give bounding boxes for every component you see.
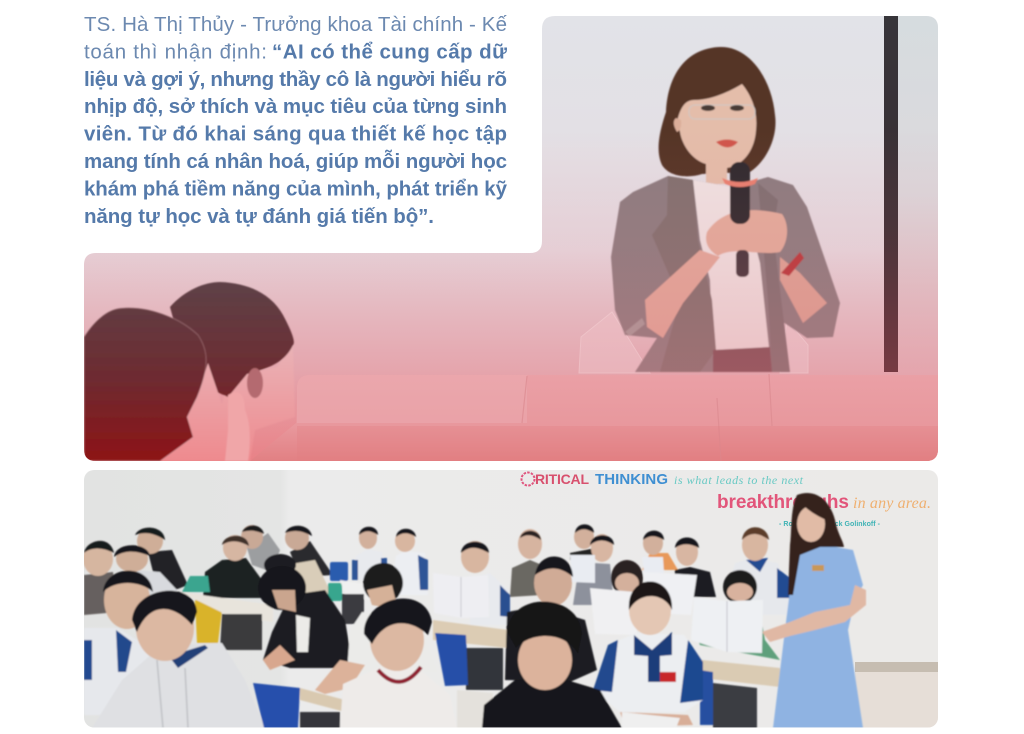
panel: speaker photo with pink gradient — [84, 16, 938, 461]
pink fade over speaker — [84, 175, 938, 458]
quote text block: năng tự học và tự đánh giá tiến bộ”. — [84, 205, 434, 228]
quote text block: toán thì nhận định: — [84, 40, 267, 63]
middle row students, left side — [84, 563, 438, 715]
quote text block: nhịp độ, sở thích và mục tiêu của từng sinh — [84, 95, 507, 118]
panel: classroom photo — [83, 470, 938, 728]
front row: student in red-collar shirt — [338, 598, 433, 728]
wall quote: RITICAL — [535, 471, 589, 487]
figure: speaker with microphone — [611, 47, 840, 372]
quote text block: viên. Từ đó khai sáng qua thiết kế học tập — [84, 123, 507, 146]
teacher in blue dress — [762, 493, 866, 728]
back row students — [83, 525, 428, 615]
wall quote: THINKING — [595, 471, 668, 488]
desk foreground — [250, 374, 938, 461]
quote text block: TS. Hà Thị Thủy - Trưởng khoa Tài chính - Kế — [84, 13, 508, 36]
quote text block: “AI có thể cung cấp dữ — [272, 40, 507, 63]
chairs and desks, left side — [180, 562, 508, 690]
quote text block: mang tính cá nhân hoá, giúp mỗi người học — [84, 149, 507, 173]
wall quote: - Roberta Michnick Golinkoff - — [779, 521, 881, 528]
quote text block — [84, 13, 508, 228]
wall quote — [522, 471, 931, 528]
wall quote: is what leads to the next — [674, 473, 804, 487]
front student in black t-shirt — [482, 601, 680, 728]
quote text block: liệu và gợi ý, nhưng thầy cô là người hiểu rõ — [84, 68, 507, 91]
figure: two students in the foreground — [84, 282, 295, 461]
middle row students and worksheets — [505, 555, 780, 728]
wall quote: in any area. — [853, 495, 931, 512]
floor and baseboard — [855, 662, 938, 728]
student in UEF polo — [593, 582, 703, 727]
student holding workbook — [460, 540, 511, 626]
blue chair and desk, lower — [253, 683, 493, 728]
wall quote: breakthroughs — [717, 492, 849, 513]
front row: student in hoodie — [92, 591, 265, 728]
back row students, right side — [510, 524, 790, 615]
quote text block: khám phá tiềm năng của mình, phát triển kỹ — [84, 177, 508, 200]
